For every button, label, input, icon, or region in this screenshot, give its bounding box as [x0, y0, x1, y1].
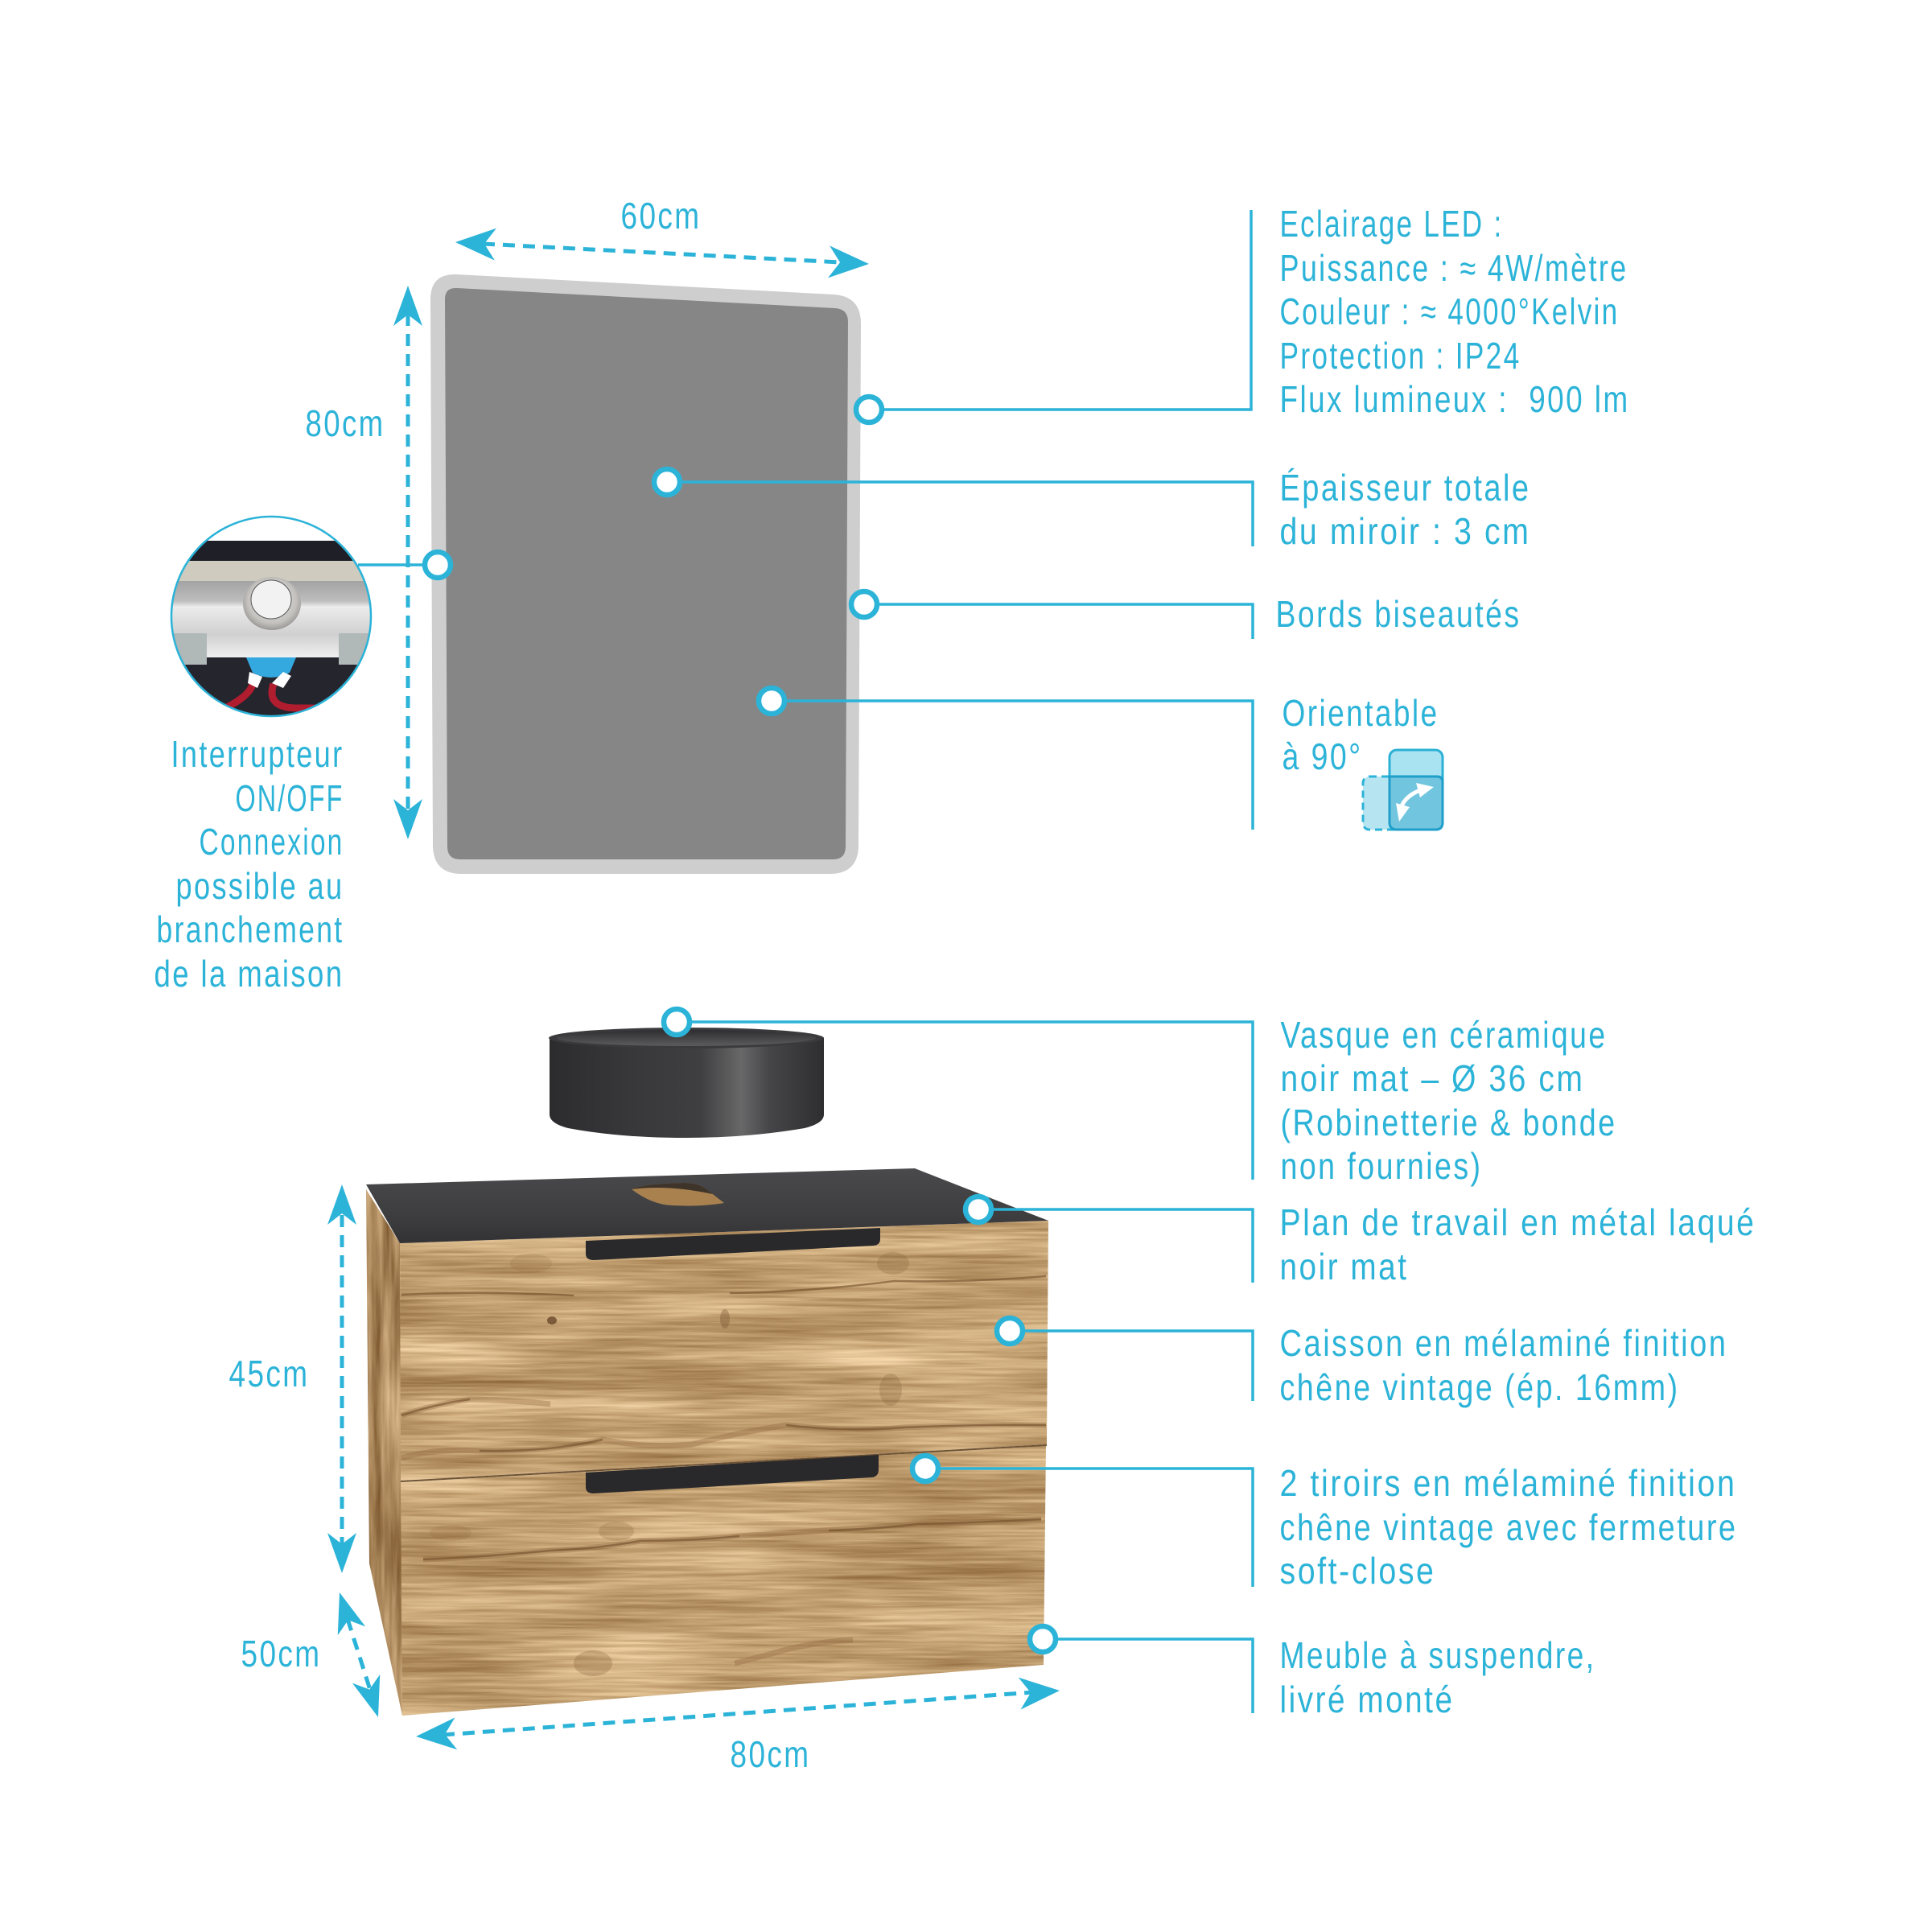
text: LED specs: Flux lumineux : 900 lm [1279, 378, 1630, 420]
icon: rotate 90 degrees [1363, 750, 1443, 830]
text: basin: non fournies) [1281, 1145, 1482, 1187]
text: carcass: Caisson en mélaminé finition [1279, 1322, 1728, 1364]
text: orientable: Orientable [1283, 692, 1439, 734]
text: thickness: Épaisseur totale [1279, 467, 1530, 509]
leader: thickness [654, 469, 1253, 546]
text: basin: (Robinetterie & bonde [1281, 1102, 1617, 1143]
text: basin [1281, 1014, 1617, 1187]
leader: bevel [851, 591, 1253, 639]
text: basin: Vasque en céramique [1281, 1014, 1608, 1056]
lower handle [586, 1455, 879, 1493]
text: bevel: Bords biseautés [1276, 593, 1521, 635]
text: LED specs: Puissance : ≈ 4W/mètre [1279, 247, 1628, 289]
label: 80cm mirror: 80cm [306, 402, 385, 444]
cabinet [362, 1168, 1054, 1722]
label: switch text: ON/OFF [235, 777, 344, 819]
label: switch text [154, 733, 344, 995]
label: switch text: Connexion [200, 821, 344, 863]
text: drawers: 2 tiroirs en mélaminé finition [1279, 1462, 1736, 1504]
text: worktop: noir mat [1279, 1246, 1408, 1287]
text: wall-mounted [1279, 1634, 1596, 1720]
leader: LED [856, 210, 1251, 422]
text: LED specs: Protection : IP24 [1279, 335, 1521, 377]
icon: switch close-up [171, 517, 371, 718]
text: wall-mounted: livré monté [1279, 1679, 1455, 1720]
upper drawer wood [394, 1215, 1054, 1489]
text: thickness [1279, 467, 1530, 552]
label: switch text: possible au [175, 865, 344, 907]
text: drawers: soft-close [1279, 1550, 1435, 1592]
text: carcass: chêne vintage (ép. 16mm) [1279, 1366, 1680, 1408]
cabinet side [366, 1189, 402, 1716]
lower drawer wood [394, 1440, 1054, 1722]
leader: worktop [966, 1197, 1253, 1283]
dimension arrow: cabinet height 45cm [327, 1184, 356, 1573]
leader: basin [664, 1009, 1253, 1180]
text: LED specs: Eclairage LED : [1279, 203, 1503, 245]
text: thickness: du miroir : 3 cm [1279, 510, 1530, 552]
dimension arrow: cabinet depth 50cm [326, 1588, 392, 1721]
label: 45cm: 45cm [229, 1353, 309, 1394]
text: worktop [1279, 1201, 1756, 1287]
text: carcass [1279, 1322, 1728, 1408]
text: LED specs [1279, 203, 1630, 420]
leader: carcass [997, 1318, 1253, 1401]
label: switch text: de la maison [154, 953, 344, 995]
leader: drawers [912, 1456, 1253, 1587]
text: wall-mounted: Meuble à suspendre, [1279, 1634, 1596, 1676]
leader: switch [358, 552, 451, 578]
label: switch text: Interrupteur [171, 733, 344, 775]
dimension arrow: mirror height 80cm [393, 286, 422, 839]
label: 80cm cabinet: 80cm [731, 1733, 811, 1775]
label: 50cm: 50cm [241, 1633, 322, 1675]
label: switch text: branchement [156, 908, 344, 950]
text: basin: noir mat – Ø 36 cm [1281, 1057, 1585, 1099]
text: drawers [1279, 1462, 1738, 1592]
text: LED specs: Couleur : ≈ 4000°Kelvin [1279, 290, 1619, 332]
leader: wall-mounted [1030, 1626, 1253, 1713]
text: worktop: Plan de travail en métal laqué [1279, 1201, 1756, 1243]
upper handle [586, 1228, 880, 1260]
leader: orientable [759, 688, 1253, 830]
text: drawers: chêne vintage avec fermeture [1279, 1506, 1738, 1548]
basin [549, 1028, 824, 1138]
worktop [366, 1168, 1048, 1243]
label: 60cm: 60cm [621, 195, 702, 237]
drawer gap [401, 1445, 1047, 1481]
mirror [430, 274, 861, 874]
text: orientable: à 90° [1283, 735, 1363, 777]
text: orientable [1283, 692, 1439, 777]
dimension arrow: mirror width 60cm [455, 226, 870, 280]
dimension arrow: cabinet width 80cm [415, 1675, 1060, 1753]
